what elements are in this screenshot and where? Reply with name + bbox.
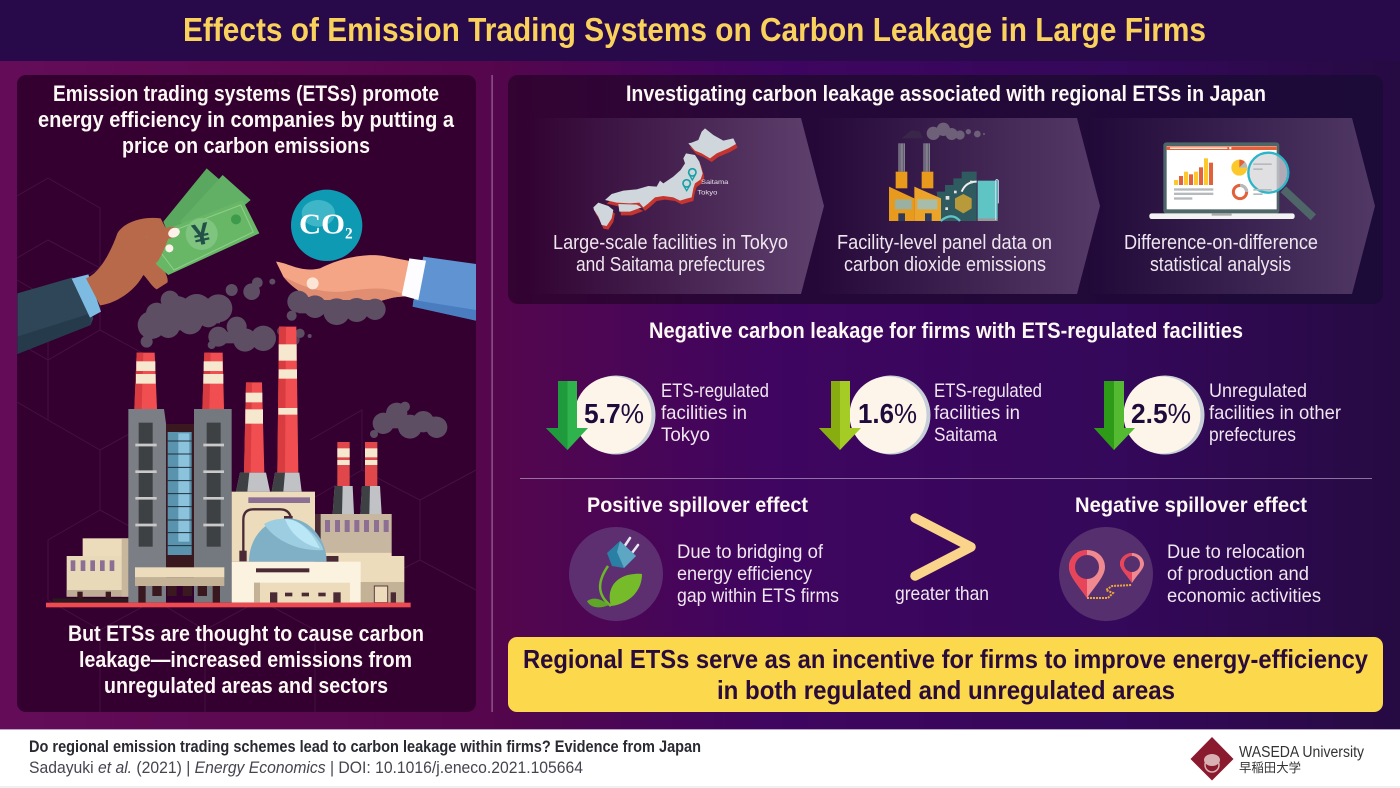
icon: hands exchanging money and CO2 (17, 168, 476, 354)
yen symbol: ¥ (189, 216, 213, 253)
intro text: price on carbon emissions (122, 133, 370, 158)
stat: 1.6% Saitama: 1.6% (858, 398, 917, 429)
positive spillover effect: energy efficiency (677, 563, 812, 585)
icon: plug with leaf (587, 538, 642, 607)
stat: 1.6% Saitama (819, 376, 1042, 454)
step 3: statistical analysis (1077, 118, 1375, 294)
step 2: panel data: Facility-level panel data on (837, 232, 1052, 254)
step 3: statistical analysis: Difference-on-difference (1124, 232, 1318, 254)
heading: investigating: Investigating carbon leakage associated with regional ETSs in Japan (626, 81, 1266, 106)
stat: 2.5% other prefectures: Unregulated (1209, 380, 1307, 402)
arrow: decrease (1094, 381, 1135, 450)
step 1: facilities in Tokyo and Saitama: and Saitama prefectures (576, 254, 765, 276)
heading: negative carbon leakage: Negative carbon leakage for firms with ETS-regulated facilities (649, 318, 1243, 343)
stat: 2.5% other prefectures: facilities in other (1209, 402, 1341, 424)
stat: 1.6% Saitama: ETS-regulated (934, 380, 1042, 402)
icon: CO2 bubble: CO (299, 209, 345, 240)
centre and right buildings (232, 492, 404, 603)
stat: 2.5% other prefectures: prefectures (1209, 424, 1296, 446)
arrow: decrease (819, 381, 861, 450)
positive spillover effect: Positive spillover effect (587, 494, 808, 517)
icon: map of Japan (593, 128, 738, 230)
greater than comparison (895, 518, 989, 605)
logo: Waseda University (1190, 737, 1364, 780)
icon: map of Japan: Saitama (701, 179, 729, 186)
title: Effects of Emission Trading Systems on Carbon Leakage in Large Firms (183, 11, 1206, 48)
negative spillover effect: Due to relocation (1167, 541, 1305, 563)
icon: map of Japan: Tokyo (697, 189, 718, 196)
stat: 1.6% Saitama: Saitama (934, 424, 997, 446)
icon: CO2 bubble (291, 190, 362, 261)
icon: industrial plant (889, 123, 998, 221)
positive spillover effect: Due to bridging of (677, 541, 824, 563)
towers (128, 409, 232, 603)
stat: 5.7% Tokyo: 5.7% (584, 398, 644, 429)
carbon leakage text (68, 621, 424, 698)
step 2: panel data: carbon dioxide emissions (844, 254, 1046, 276)
logo: Waseda University: WASEDA University (1239, 744, 1364, 761)
stat: 2.5% other prefectures (1094, 376, 1341, 454)
step 3: statistical analysis: statistical analysis (1150, 254, 1291, 276)
carbon leakage text: leakage—increased emissions from (79, 647, 412, 672)
step 1: facilities in Tokyo and Saitama (530, 118, 824, 294)
positive spillover effect (569, 494, 839, 621)
negative spillover effect: economic activities (1167, 585, 1321, 607)
arrow: decrease (546, 381, 588, 450)
intro text: Emission trading systems (ETSs) promote (53, 81, 439, 106)
stat: 5.7% Tokyo: Tokyo (661, 424, 710, 446)
carbon leakage text: unregulated areas and sectors (104, 673, 388, 698)
logo: Waseda University: 早稲田大学 (1239, 760, 1301, 775)
icon: CO2 bubble: 2 (345, 226, 353, 243)
carbon leakage text: But ETSs are thought to cause carbon (68, 621, 424, 646)
greater than comparison: greater than (895, 583, 989, 605)
callout: conclusion (508, 637, 1383, 712)
stat: 2.5% other prefectures: 2.5% (1131, 398, 1191, 429)
panel: investigating carbon leakage (508, 75, 1383, 304)
footer (0, 729, 1400, 788)
title bar (0, 0, 1400, 61)
citation: Sadayuki et al. (2021) | Energy Economics | DOI: 10.1016/j.eneco.2021.105664 (29, 759, 583, 777)
negative spillover effect: of production and (1167, 563, 1309, 585)
intro text: energy efficiency in companies by putting a (38, 107, 455, 132)
icon: laptop with magnifier (1149, 142, 1313, 219)
illustration: factory (46, 327, 411, 607)
chimneys (134, 327, 382, 514)
positive spillover effect: gap within ETS firms (677, 585, 839, 607)
stat: 1.6% Saitama: facilities in (934, 402, 1020, 424)
left low building (67, 538, 128, 598)
stat: 5.7% Tokyo: ETS-regulated (661, 380, 769, 402)
panel: ETS introduction (17, 75, 476, 712)
citation (29, 738, 701, 777)
divider between left and right columns (492, 75, 493, 712)
intro text (38, 81, 455, 158)
icon: smoke clouds (138, 277, 447, 439)
step 2: panel data (801, 118, 1100, 294)
callout: conclusion: in both regulated and unregulated areas (717, 675, 1175, 705)
icon: relocation pins (1069, 550, 1144, 598)
negative spillover effect: Negative spillover effect (1075, 494, 1307, 517)
stat: 5.7% Tokyo (546, 376, 769, 454)
stat: 5.7% Tokyo: facilities in (661, 402, 747, 424)
negative spillover effect (1059, 494, 1321, 621)
step 1: facilities in Tokyo and Saitama: Large-scale facilities in Tokyo (553, 232, 788, 254)
citation: Do regional emission trading schemes lead to carbon leakage within firms? Evidence from Japan (29, 738, 701, 756)
